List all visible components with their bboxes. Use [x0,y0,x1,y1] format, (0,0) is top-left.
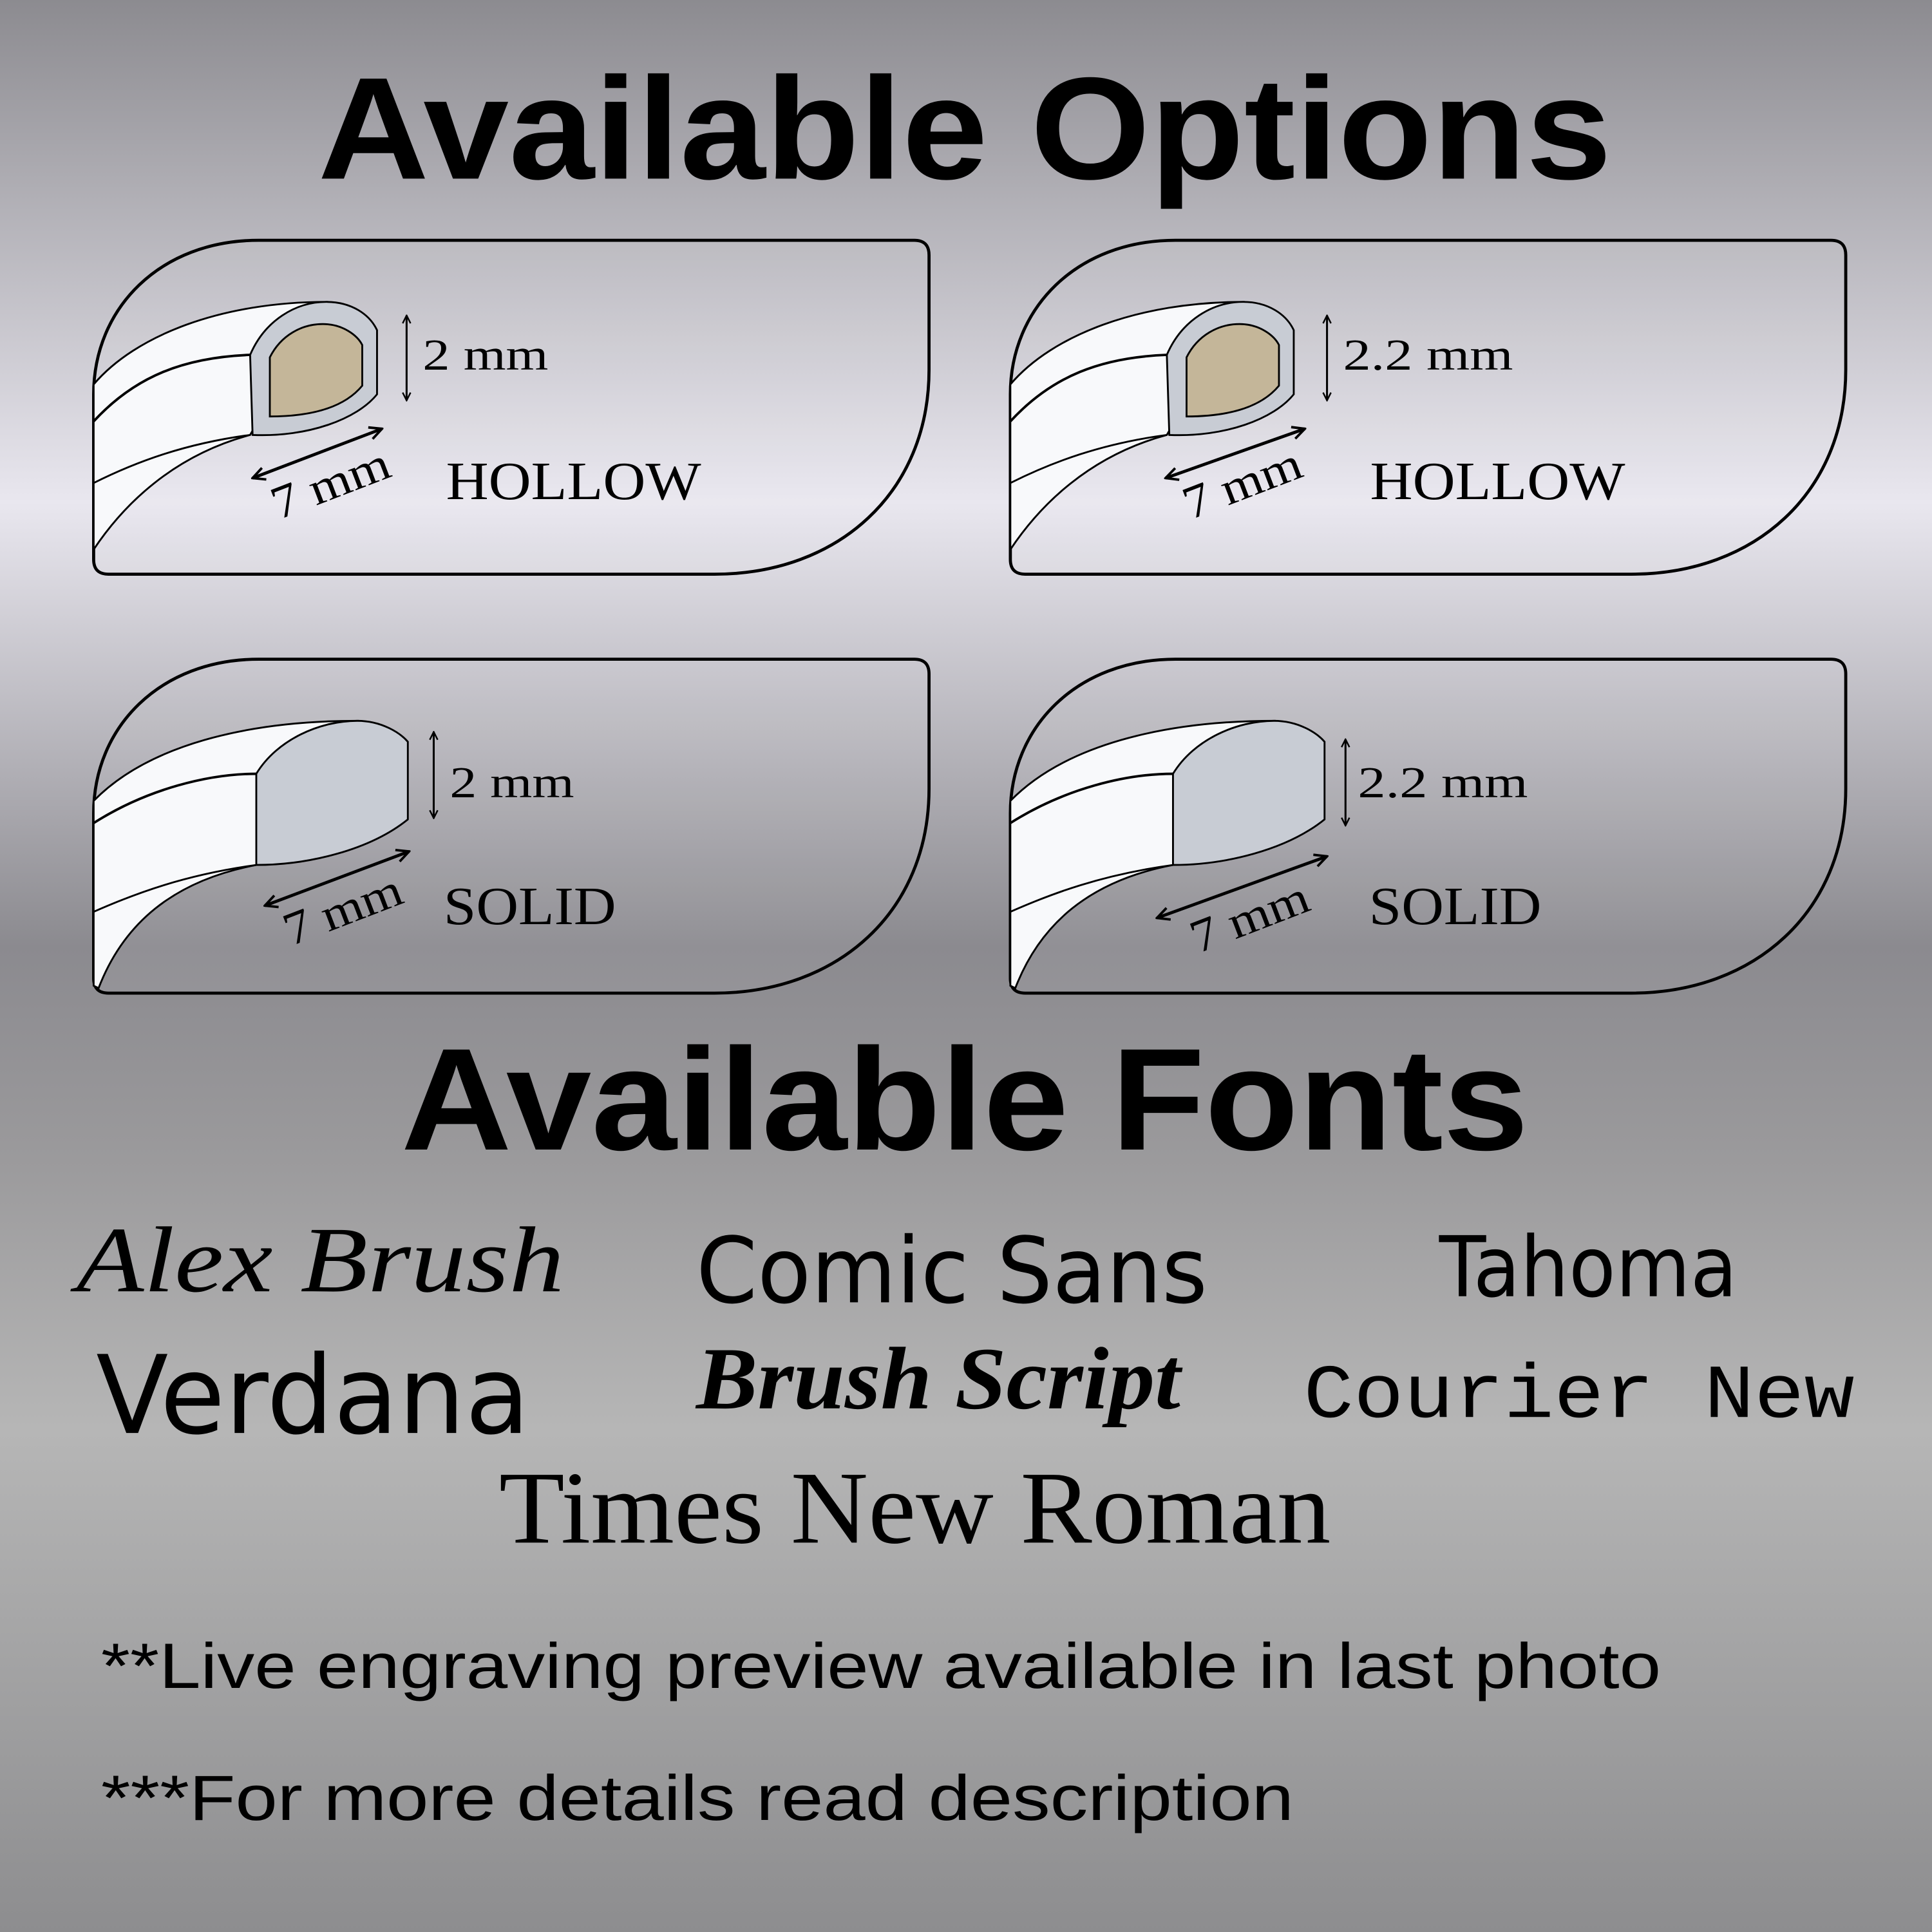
panel: solid 2 mm: SOLID [444,876,616,936]
panel: hollow 2 mm [93,240,929,574]
note: description: ***For more details read description [101,1763,1294,1834]
panel: hollow 2.2 mm: 7 mm [1175,437,1309,529]
panel: hollow 2.2 mm: HOLLOW [1370,451,1625,511]
panel: hollow 2 mm: HOLLOW [446,451,701,511]
panel: solid 2.2 mm: 2.2 mm [1358,758,1528,807]
panel: hollow 2.2 mm [1010,240,1846,574]
font sample: alex brush: Alex Brush [70,1208,564,1312]
panel: solid 2.2 mm: 7 mm [1182,871,1316,963]
font sample: brush script: Brush Script [695,1329,1183,1428]
font sample: verdana: Verdana [96,1332,530,1459]
panel: solid 2 mm: 2 mm [450,758,574,807]
panel: hollow 2.2 mm: 2.2 mm [1343,330,1513,379]
title: available options: Available Options [318,47,1612,209]
font sample: times new roman: Times New Roman [499,1450,1331,1565]
panel: hollow 2 mm: 2 mm [422,330,548,379]
panel: solid 2 mm: 7 mm [276,863,410,956]
font sample: tahoma: Tahoma [1439,1218,1738,1316]
font sample: courier new: Courier New [1303,1353,1854,1440]
panel: solid 2 mm [93,659,929,993]
title: available fonts: Available Fonts [401,1018,1528,1180]
font sample: comic sans: Comic Sans [696,1218,1208,1324]
panel: solid 2.2 mm [1010,659,1846,993]
panel: hollow 2 mm: 7 mm [263,437,397,529]
panel: solid 2.2 mm: SOLID [1369,876,1541,936]
note: live preview: **Live engraving preview available in last photo [101,1631,1661,1702]
